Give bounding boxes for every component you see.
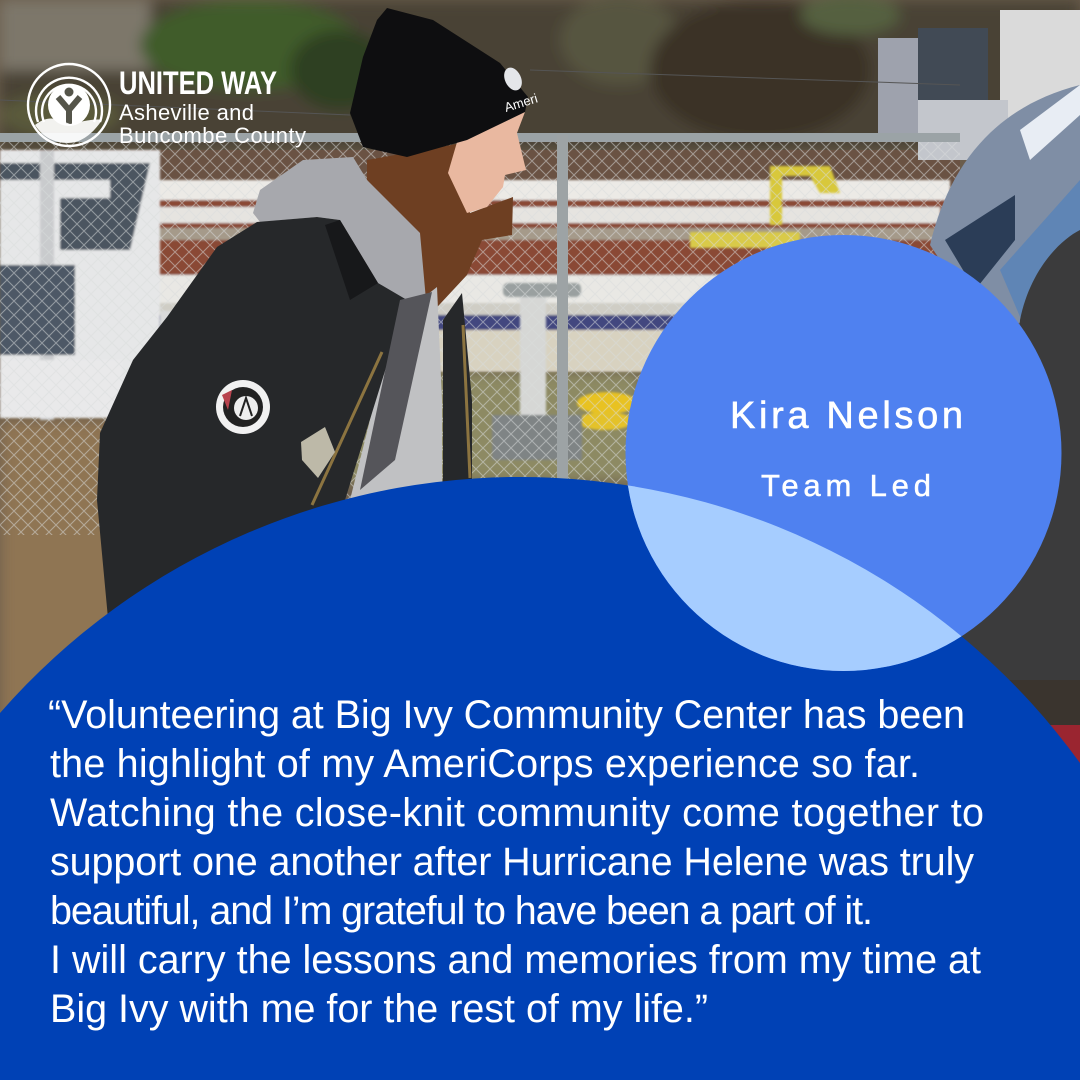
face <box>448 112 526 213</box>
brown backdrop behind fence <box>0 150 960 190</box>
beanie logo <box>501 65 525 93</box>
circle overlap <box>628 486 962 671</box>
woman in beanie and jacket <box>97 8 539 640</box>
name circle <box>626 235 1062 671</box>
hoodie <box>253 157 426 320</box>
trailer truck <box>878 10 1080 160</box>
quote text: support one another after Hurricane Helene was truly <box>50 840 974 884</box>
scale and post equipment <box>492 283 582 460</box>
quote text <box>48 693 984 1031</box>
United Way logo <box>28 64 306 148</box>
quote text: “Volunteering at Big Ivy Community Center has been <box>48 693 965 737</box>
chain-link fence <box>0 70 960 535</box>
quote text: I will carry the lessons and memories from my time at <box>50 938 981 982</box>
logo subheading: Asheville and <box>119 100 254 125</box>
logo emblem <box>28 64 110 146</box>
quote text: Big Ivy with me for the rest of my life.” <box>50 987 708 1031</box>
beanie <box>350 8 539 157</box>
role: Team Led <box>761 468 931 503</box>
beanie text: Ameri <box>502 91 539 115</box>
name: Kira Nelson <box>730 395 963 437</box>
undershirt <box>350 287 442 500</box>
quote text: beautiful, and I’m grateful to have been a part of it. <box>50 889 873 933</box>
AmeriCorps patch <box>216 380 270 434</box>
bleachers <box>130 180 960 372</box>
jacket <box>97 217 407 640</box>
tree line <box>0 0 1080 150</box>
cream pocket tag <box>301 427 335 478</box>
yellow equipment <box>577 166 840 430</box>
quote text: Watching the close-knit community come together to <box>50 791 984 835</box>
truck at right <box>930 85 1080 765</box>
logo heading: UNITED WAY <box>119 65 277 101</box>
white sign structure at left <box>0 150 160 420</box>
quote text: the highlight of my AmeriCorps experience so far. <box>50 742 920 786</box>
hair back <box>367 143 513 318</box>
zipper <box>312 325 470 505</box>
grass and dirt <box>0 372 640 740</box>
United Way logo: Buncombe County <box>119 123 306 148</box>
blue panel background <box>0 477 1080 1080</box>
